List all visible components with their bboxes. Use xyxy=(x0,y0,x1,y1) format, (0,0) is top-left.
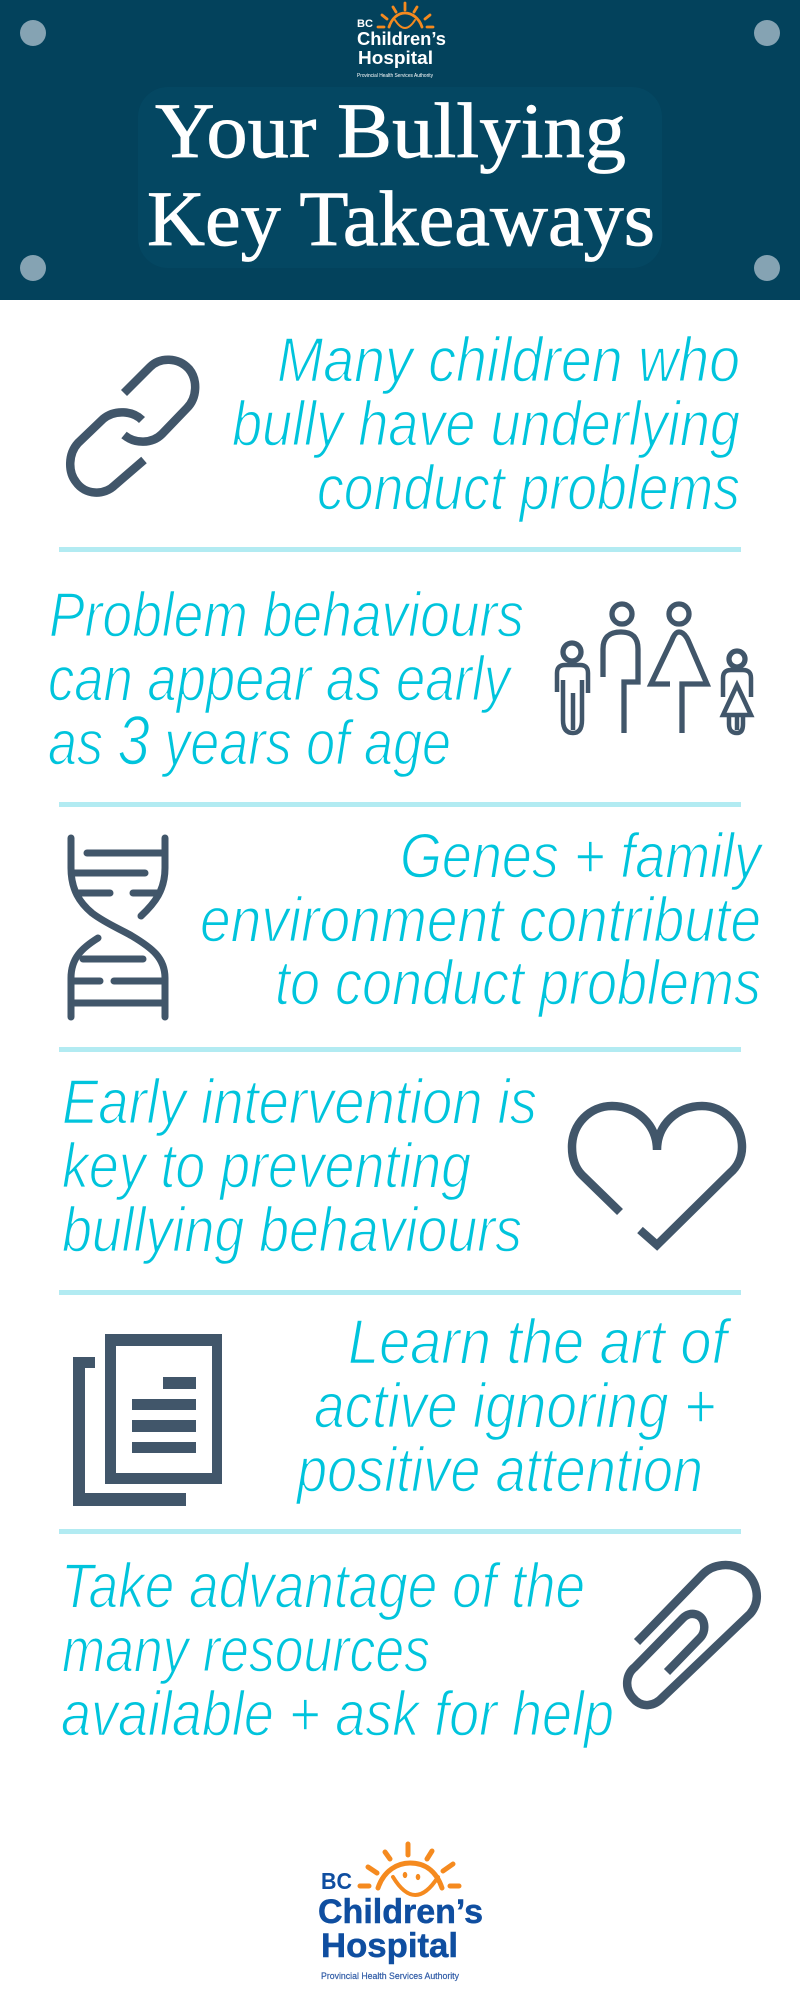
text: early behaviours: Problem behaviours xyxy=(49,581,524,651)
divider xyxy=(59,547,741,552)
text: active ignoring: Learn the art of xyxy=(348,1308,732,1378)
panel: takeaway 5 xyxy=(59,1308,741,1534)
logo: BC Children's Hospital white: Hospital xyxy=(358,48,433,68)
divider xyxy=(59,802,741,807)
panel: takeaway 1 xyxy=(59,326,741,552)
text: conduct problems: Many children who xyxy=(277,326,740,396)
text: conduct problems: conduct problems xyxy=(317,454,740,524)
text: early behaviours: as 3 years of age xyxy=(48,702,451,780)
text: resources: available + ask for help xyxy=(61,1680,614,1750)
icon: documents xyxy=(73,1334,222,1506)
panel: takeaway 6 xyxy=(61,1552,757,1750)
logo sun xyxy=(378,3,433,28)
logo: BC Children's Hospital white xyxy=(357,3,446,79)
header banner xyxy=(0,0,800,300)
logo sun xyxy=(360,1844,459,1895)
divider xyxy=(59,1047,741,1052)
text: early behaviours xyxy=(48,581,524,780)
corner dots xyxy=(20,20,780,281)
title xyxy=(147,87,655,262)
title: Your Bullying xyxy=(155,87,626,174)
icon: family xyxy=(557,604,751,733)
panel: takeaway 3 xyxy=(59,822,764,1052)
panel: takeaway 2 xyxy=(48,581,751,807)
icon: paperclip xyxy=(627,1565,757,1705)
logo: BC Children's Hospital blue: BC xyxy=(321,1868,352,1894)
text: early intervention xyxy=(62,1068,537,1266)
text: resources xyxy=(61,1552,614,1750)
divider xyxy=(59,1529,741,1534)
logo: BC Children's Hospital blue: Children’s xyxy=(318,1893,483,1931)
icon: chain link xyxy=(70,360,195,493)
text: active ignoring: positive attention xyxy=(295,1436,703,1506)
logo: BC Children's Hospital blue: Hospital xyxy=(321,1927,458,1965)
icon: dna helix xyxy=(71,838,165,1017)
logo: BC Children's Hospital white: BC xyxy=(357,18,373,30)
logo: BC Children's Hospital blue xyxy=(318,1844,483,1982)
text: early behaviours: can appear as early xyxy=(48,645,513,715)
title: Key Takeaways xyxy=(147,175,655,262)
logo: BC Children's Hospital white: Provincial Health Services Authority xyxy=(357,73,433,79)
text: genes and environment xyxy=(200,822,764,1019)
text: conduct problems xyxy=(232,326,740,524)
divider xyxy=(59,1290,741,1295)
text: resources: Take advantage of the xyxy=(61,1552,585,1622)
logo: BC Children's Hospital blue: Provincial Health Services Authority xyxy=(321,1971,459,1982)
icon: heart check xyxy=(572,1106,742,1245)
banner background xyxy=(0,0,800,300)
text: early intervention: bullying behaviours xyxy=(62,1196,522,1266)
text: early intervention: key to preventing xyxy=(62,1132,471,1202)
logo: BC Children's Hospital white: Children’s xyxy=(357,29,446,49)
title panel xyxy=(138,87,662,268)
text: active ignoring xyxy=(295,1308,732,1506)
text: early intervention: Early intervention is xyxy=(62,1068,537,1138)
text: resources: many resources xyxy=(62,1616,430,1686)
panel: takeaway 4 xyxy=(59,1068,742,1295)
text: active ignoring: active ignoring + xyxy=(314,1372,716,1442)
